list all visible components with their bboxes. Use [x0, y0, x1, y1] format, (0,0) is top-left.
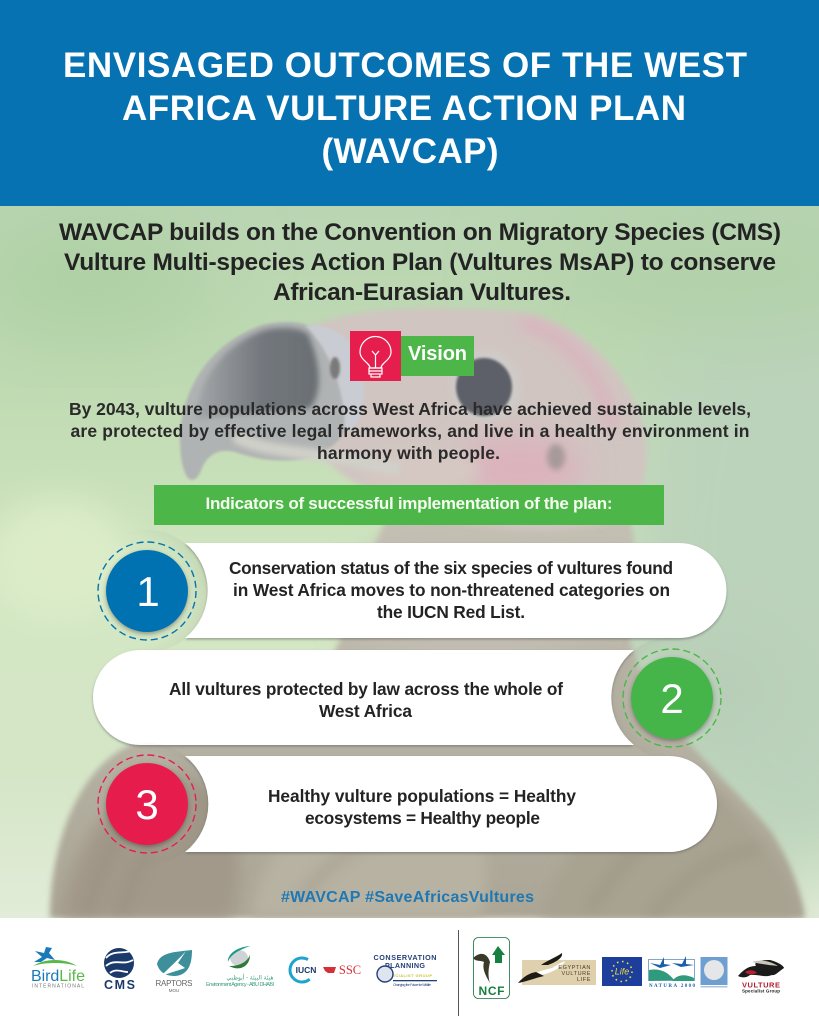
vision badge [350, 331, 474, 381]
logo: Vulture Specialist Group: VULTURE [742, 980, 780, 990]
indicator 1: the IUCN Red List. [377, 602, 525, 622]
indicator 2: All vultures protected by law across the whole of [169, 679, 563, 699]
logo: BirdLife International [31, 947, 85, 990]
logo: Raptors MoU: MOU [169, 988, 179, 993]
eye [451, 350, 521, 422]
logo: Egyptian Vulture New Life: EGYPTIAN [558, 965, 591, 971]
footer logos [0, 918, 819, 1024]
beak [180, 322, 347, 480]
logo: NCF [473, 938, 510, 998]
indicator 3: ecosystems = Healthy people [305, 808, 540, 828]
indicators heading bar: Indicators of successful implementation of the plan: [206, 494, 612, 513]
neck and body [50, 480, 805, 918]
hashtags: #WAVCAP #SaveAfricasVultures [281, 889, 534, 906]
logo: foundation medal [700, 957, 728, 988]
logo: NCF: NCF [478, 984, 504, 998]
icon: light bulb [360, 336, 391, 377]
indicator 2: 2 [660, 675, 684, 722]
logo: Conservation Planning Specialist Group: SPECIALIST GROUP [386, 973, 432, 978]
intro text [59, 219, 781, 306]
logo: Conservation Planning Specialist Group: PLANNING [385, 961, 425, 970]
logo: IUCN SSC: IUCN [296, 965, 316, 975]
logo: Environment Agency Abu Dhabi [206, 946, 274, 988]
logo: Environment Agency Abu Dhabi: Environment Agency - ABU DHABI [206, 982, 274, 988]
intro text: African-Eurasian Vultures. [273, 279, 571, 306]
logo: Conservation Planning Specialist Group [374, 953, 437, 987]
indicator 1: in West Africa moves to non-threatened categories on [233, 580, 670, 600]
vision badge: Vision [408, 343, 467, 365]
photo background: vulture [0, 200, 819, 918]
logo: IUCN SSC [285, 953, 361, 987]
logo: Raptors MoU: RAPTORS [156, 979, 192, 988]
vision statement: harmony with people. [317, 443, 500, 463]
indicator 1: 1 [136, 568, 160, 615]
indicator 3: Healthy vulture populations = Healthy [268, 786, 576, 806]
logo: CMS [104, 948, 135, 992]
indicator 1 [86, 530, 727, 652]
indicator 2: West Africa [319, 701, 412, 721]
indicator 3 [86, 743, 717, 865]
vision statement: are protected by effective legal frameworks, and live in a healthy environment in [70, 421, 750, 441]
logo: Conservation Planning Specialist Group: CONSERVATION [374, 953, 436, 962]
logo: BirdLife International: BirdLife [31, 968, 85, 985]
logo: Egyptian Vulture New Life [517, 953, 596, 985]
indicator 1: Conservation status of the six species of vultures found [229, 558, 673, 578]
indicator 3: 3 [135, 781, 159, 828]
head [290, 308, 647, 530]
logo: EU LIFE: Life [615, 966, 629, 976]
title banner: AFRICA VULTURE ACTION PLAN [122, 89, 686, 128]
logo: EU LIFE [602, 957, 642, 986]
logo: Conservation Planning Specialist Group: Changing the Future for Wildlife [393, 983, 431, 987]
vision statement [69, 399, 751, 463]
title banner: (WAVCAP) [322, 132, 498, 171]
logo: Natura 2000 [648, 956, 696, 989]
intro text: WAVCAP builds on the Convention on Migratory Species (CMS) [59, 219, 781, 246]
logo: Raptors MoU [156, 950, 192, 993]
logo: Environment Agency Abu Dhabi: هيئة البيئة - أبوظبي [226, 974, 274, 982]
intro text: Vulture Multi-species Action Plan (Vultures MsAP) to conserve [64, 249, 776, 276]
indicator 2 [93, 637, 733, 759]
logo: Natura 2000: NATURA 2000 [649, 984, 696, 989]
indicators heading bar [154, 485, 664, 525]
vision statement: By 2043, vulture populations across West Africa have achieved sustainable levels, [69, 399, 751, 419]
title banner [0, 0, 819, 206]
logo: Vulture Specialist Group [738, 960, 784, 994]
logo: Vulture Specialist Group: Specialist Group [742, 988, 780, 994]
logo: Egyptian Vulture New Life: LIFE [577, 977, 591, 983]
logo: IUCN SSC: SSC [339, 963, 361, 977]
title banner: ENVISAGED OUTCOMES OF THE WEST [63, 46, 747, 85]
logo: CMS: CMS [104, 978, 135, 992]
logo: BirdLife International: INTERNATIONAL [32, 984, 84, 990]
logo: Egyptian Vulture New Life: VULTURE [562, 971, 591, 977]
